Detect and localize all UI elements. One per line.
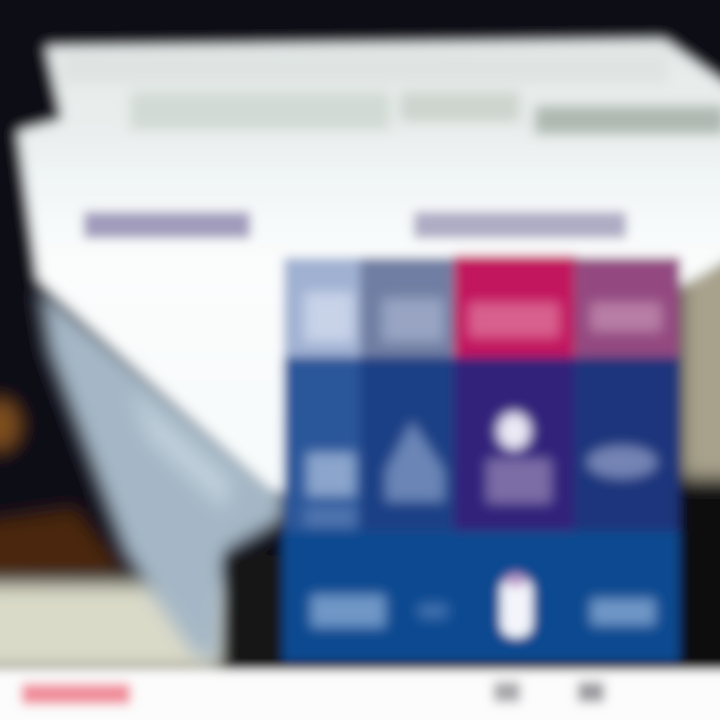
footer band bbox=[0, 670, 720, 720]
dark base block bbox=[228, 555, 284, 663]
footer marks bbox=[494, 682, 604, 702]
bottom row labels bbox=[310, 594, 656, 628]
mattress side bbox=[38, 285, 285, 660]
mattress top bbox=[16, 38, 720, 495]
title band bbox=[62, 52, 720, 134]
icon: bottom bottle bbox=[500, 573, 533, 638]
icon: middle circle bbox=[496, 411, 532, 451]
footer brand mark bbox=[22, 684, 130, 704]
header cell labels bbox=[304, 292, 662, 342]
grid cell backgrounds bbox=[282, 256, 680, 663]
heading left bbox=[84, 212, 250, 238]
mattress side highlight bbox=[130, 390, 230, 510]
comparison grid bbox=[282, 256, 680, 663]
middle row content bbox=[304, 420, 658, 527]
heading right bbox=[414, 212, 626, 238]
